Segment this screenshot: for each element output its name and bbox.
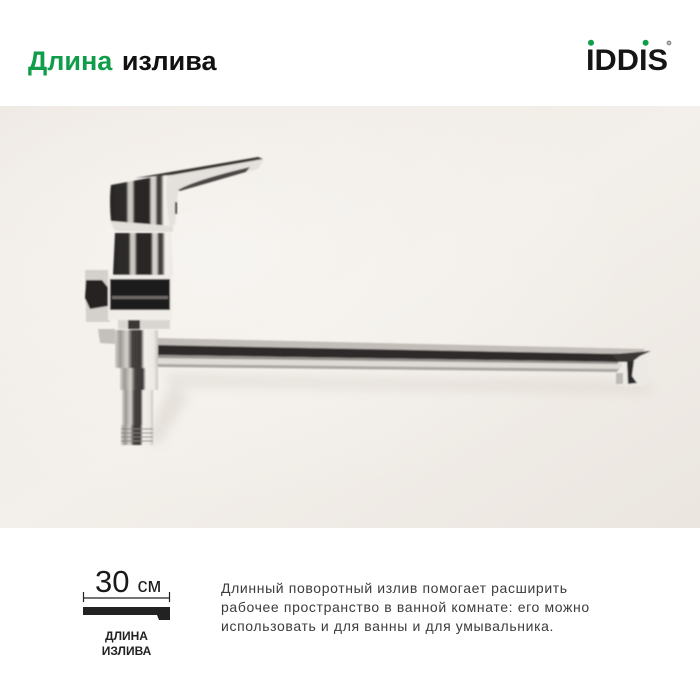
title: Длина излива (28, 46, 216, 76)
value: 30 cm: 30 см (95, 564, 161, 599)
spout tip (615, 351, 651, 386)
description text: Длинный поворотный излив помогает расширить (221, 580, 568, 596)
lever handle (135, 157, 263, 226)
label: spout length: ДЛИНА (105, 629, 148, 643)
spout silhouette (82, 592, 170, 620)
label: spout length (102, 629, 151, 658)
lever body (110, 174, 172, 226)
description text: использовать и для ванны и для умывальника. (221, 618, 554, 634)
description text: рабочее пространство в ванной комнате: его можно (221, 599, 590, 615)
icon: spout length (82, 564, 170, 658)
side nut (85, 270, 115, 344)
upper cylinder (113, 233, 173, 275)
middle cartridge block (108, 275, 172, 329)
label: spout length: ИЗЛИВА (102, 644, 151, 658)
lower stem and thread (115, 330, 158, 445)
spout pipe (156, 338, 651, 386)
shadow under faucet (145, 372, 650, 445)
product photo: faucet with long spout (0, 106, 700, 528)
description text (221, 580, 590, 634)
collar (110, 221, 173, 232)
